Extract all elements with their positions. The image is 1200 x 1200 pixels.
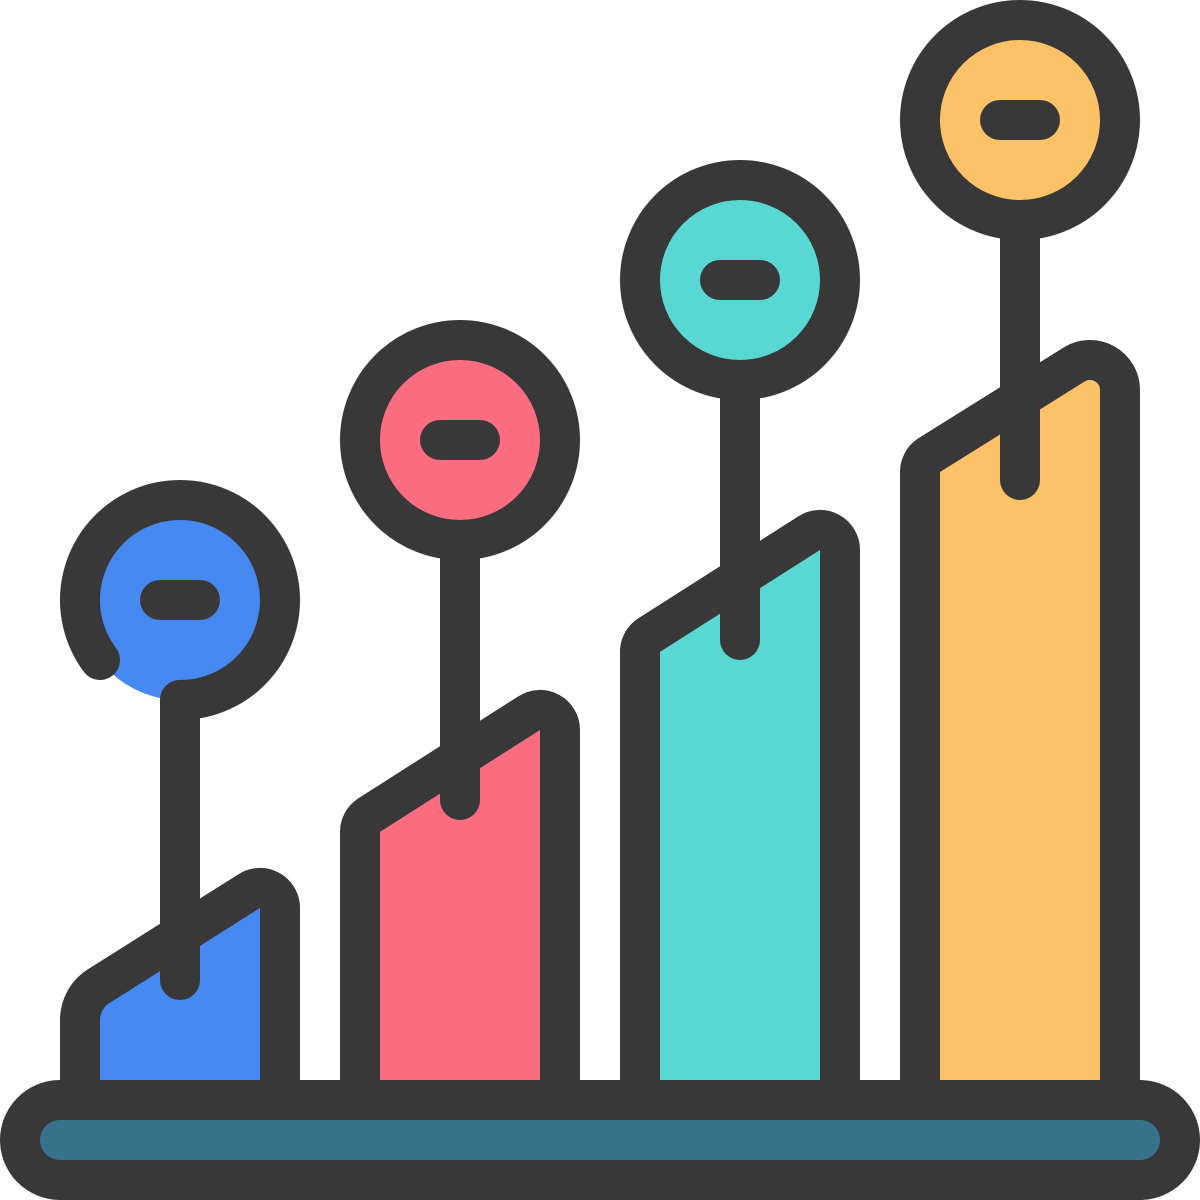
pin: orange [920,20,1120,480]
bar: orange [920,360,1120,1100]
bar: teal [640,530,840,1100]
pin: blue [80,500,280,980]
pin: red [360,340,560,800]
pin: teal [640,180,840,640]
bar: red [360,710,560,1100]
bar: blue [80,888,280,1100]
base platform [20,1100,1180,1180]
